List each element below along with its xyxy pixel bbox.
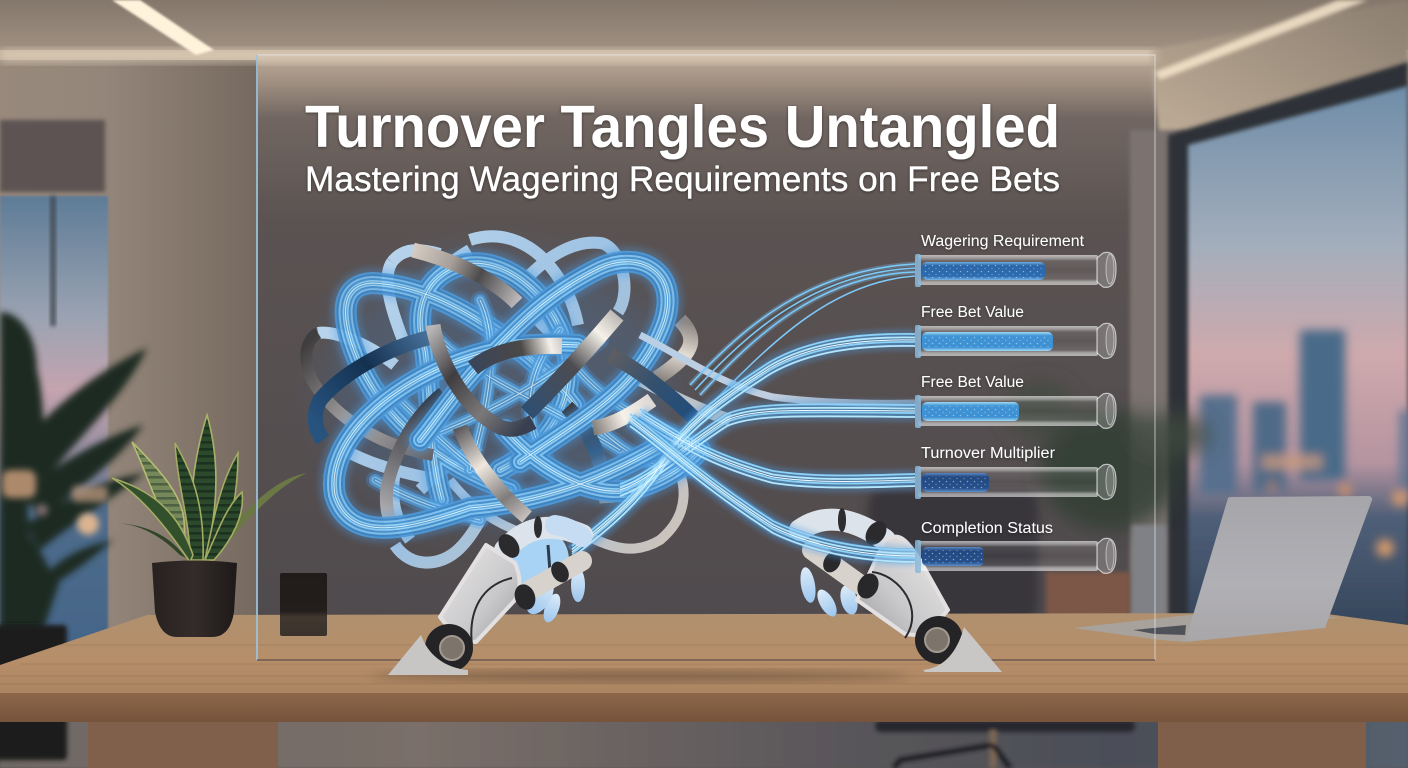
left wall — [0, 60, 258, 630]
ceiling — [0, 0, 1408, 50]
upper fingers — [800, 508, 891, 549]
label: Wagering Requirement — [921, 233, 1085, 250]
bokeh left — [2, 470, 108, 535]
gauge: Free Bet Value 2 — [915, 374, 1116, 428]
city skyline — [1200, 330, 1408, 557]
tube glass — [915, 252, 1116, 287]
right window frame — [1168, 62, 1408, 625]
tangled knot of ribbons and light strands — [306, 236, 730, 563]
blue lower fingers — [520, 568, 585, 624]
glass panel — [257, 55, 1155, 660]
palm and forearm — [857, 537, 948, 636]
light strand web — [375, 300, 690, 520]
light strands fanning out to the tubes — [572, 264, 915, 558]
light strand bundles, top layer — [334, 262, 700, 528]
ceiling light strip left — [112, 0, 214, 55]
panel top and sides — [257, 55, 1155, 660]
desk legs — [88, 722, 1366, 768]
panel left edge — [256, 55, 258, 660]
wrist curve — [471, 578, 512, 645]
strand bundle reaching the last tube — [630, 414, 915, 562]
metal ribbons, middle layer — [306, 250, 691, 527]
fill level — [922, 473, 989, 492]
window pillar — [1130, 130, 1186, 620]
ceiling right — [1150, 0, 1408, 145]
wrist curve — [872, 572, 912, 638]
label: Free Bet Value — [921, 374, 1024, 391]
blurred dark chair back — [868, 490, 1038, 620]
fill level — [922, 332, 1053, 351]
blue lower fingers — [798, 566, 861, 619]
background glow of the knot — [325, 255, 675, 525]
left window — [0, 196, 108, 646]
gauge: Wagering Requirement — [915, 233, 1116, 287]
large plant left — [0, 312, 147, 640]
snake plant — [112, 415, 307, 562]
desk grain — [0, 645, 1408, 684]
tube glass — [915, 464, 1116, 499]
robot hand left — [388, 516, 585, 675]
metal ribbons, front layer — [315, 315, 693, 517]
planter left floor — [0, 625, 67, 760]
panel bottom edge — [257, 659, 1155, 661]
desk objects — [112, 415, 1372, 681]
label: Completion Status — [921, 520, 1053, 537]
floor — [0, 720, 1408, 768]
fill sparkle — [924, 476, 987, 489]
separated strands to tubes two, three and four — [572, 334, 915, 558]
desk edge — [0, 693, 1408, 722]
plant pot — [152, 560, 237, 637]
base wedge — [388, 635, 468, 675]
tube glass — [915, 538, 1116, 573]
ceiling light strip right — [1155, 0, 1368, 80]
gauge: Completion Status — [915, 520, 1116, 573]
gauge: Free Bet Value 1 — [915, 304, 1116, 358]
wrist joint — [915, 616, 963, 664]
label: Free Bet Value — [921, 304, 1024, 321]
robot hand right — [798, 508, 1002, 672]
back wall — [0, 40, 1408, 640]
window mullion — [50, 196, 56, 326]
desk top — [0, 613, 1408, 693]
tube gauges — [915, 233, 1116, 573]
base wedge — [923, 627, 1002, 672]
blurred chair arm and cushion — [1046, 525, 1166, 618]
ribbon tail running to the third tube — [640, 335, 915, 403]
tube glass — [915, 393, 1116, 428]
cove light — [0, 50, 1155, 62]
tube glass — [915, 323, 1116, 358]
blurred background plant right — [1005, 382, 1210, 530]
label: Turnover Multiplier — [921, 445, 1055, 462]
wrist joint — [425, 624, 473, 672]
dark panel left — [0, 120, 105, 192]
gauge: Turnover Multiplier — [915, 445, 1116, 499]
palm and forearm — [440, 545, 520, 642]
laptop — [1073, 496, 1372, 642]
thumb — [511, 558, 582, 613]
fill sparkle — [924, 265, 1043, 278]
wrist bearing — [440, 636, 464, 660]
fill sparkle — [924, 405, 1017, 418]
fill sparkle — [924, 550, 982, 563]
black cup — [280, 573, 327, 636]
palm inner — [501, 526, 569, 594]
wrist bearing — [925, 628, 949, 652]
light strand bundles, under layer — [346, 263, 575, 500]
table shadows — [370, 671, 910, 681]
chair base — [875, 720, 1135, 768]
fill level — [922, 262, 1045, 280]
fill level — [922, 547, 984, 566]
strands to first tube — [690, 264, 915, 400]
upper fingers — [494, 516, 582, 572]
fill sparkle — [924, 335, 1051, 348]
title: Turnover Tangles Untangled — [305, 94, 1060, 160]
thumb — [812, 548, 883, 602]
subtitle: Mastering Wagering Requirements on Free Bets — [305, 160, 1060, 199]
right window sky — [1188, 86, 1408, 625]
pale back ribbons — [318, 236, 730, 563]
fill level — [922, 402, 1019, 421]
